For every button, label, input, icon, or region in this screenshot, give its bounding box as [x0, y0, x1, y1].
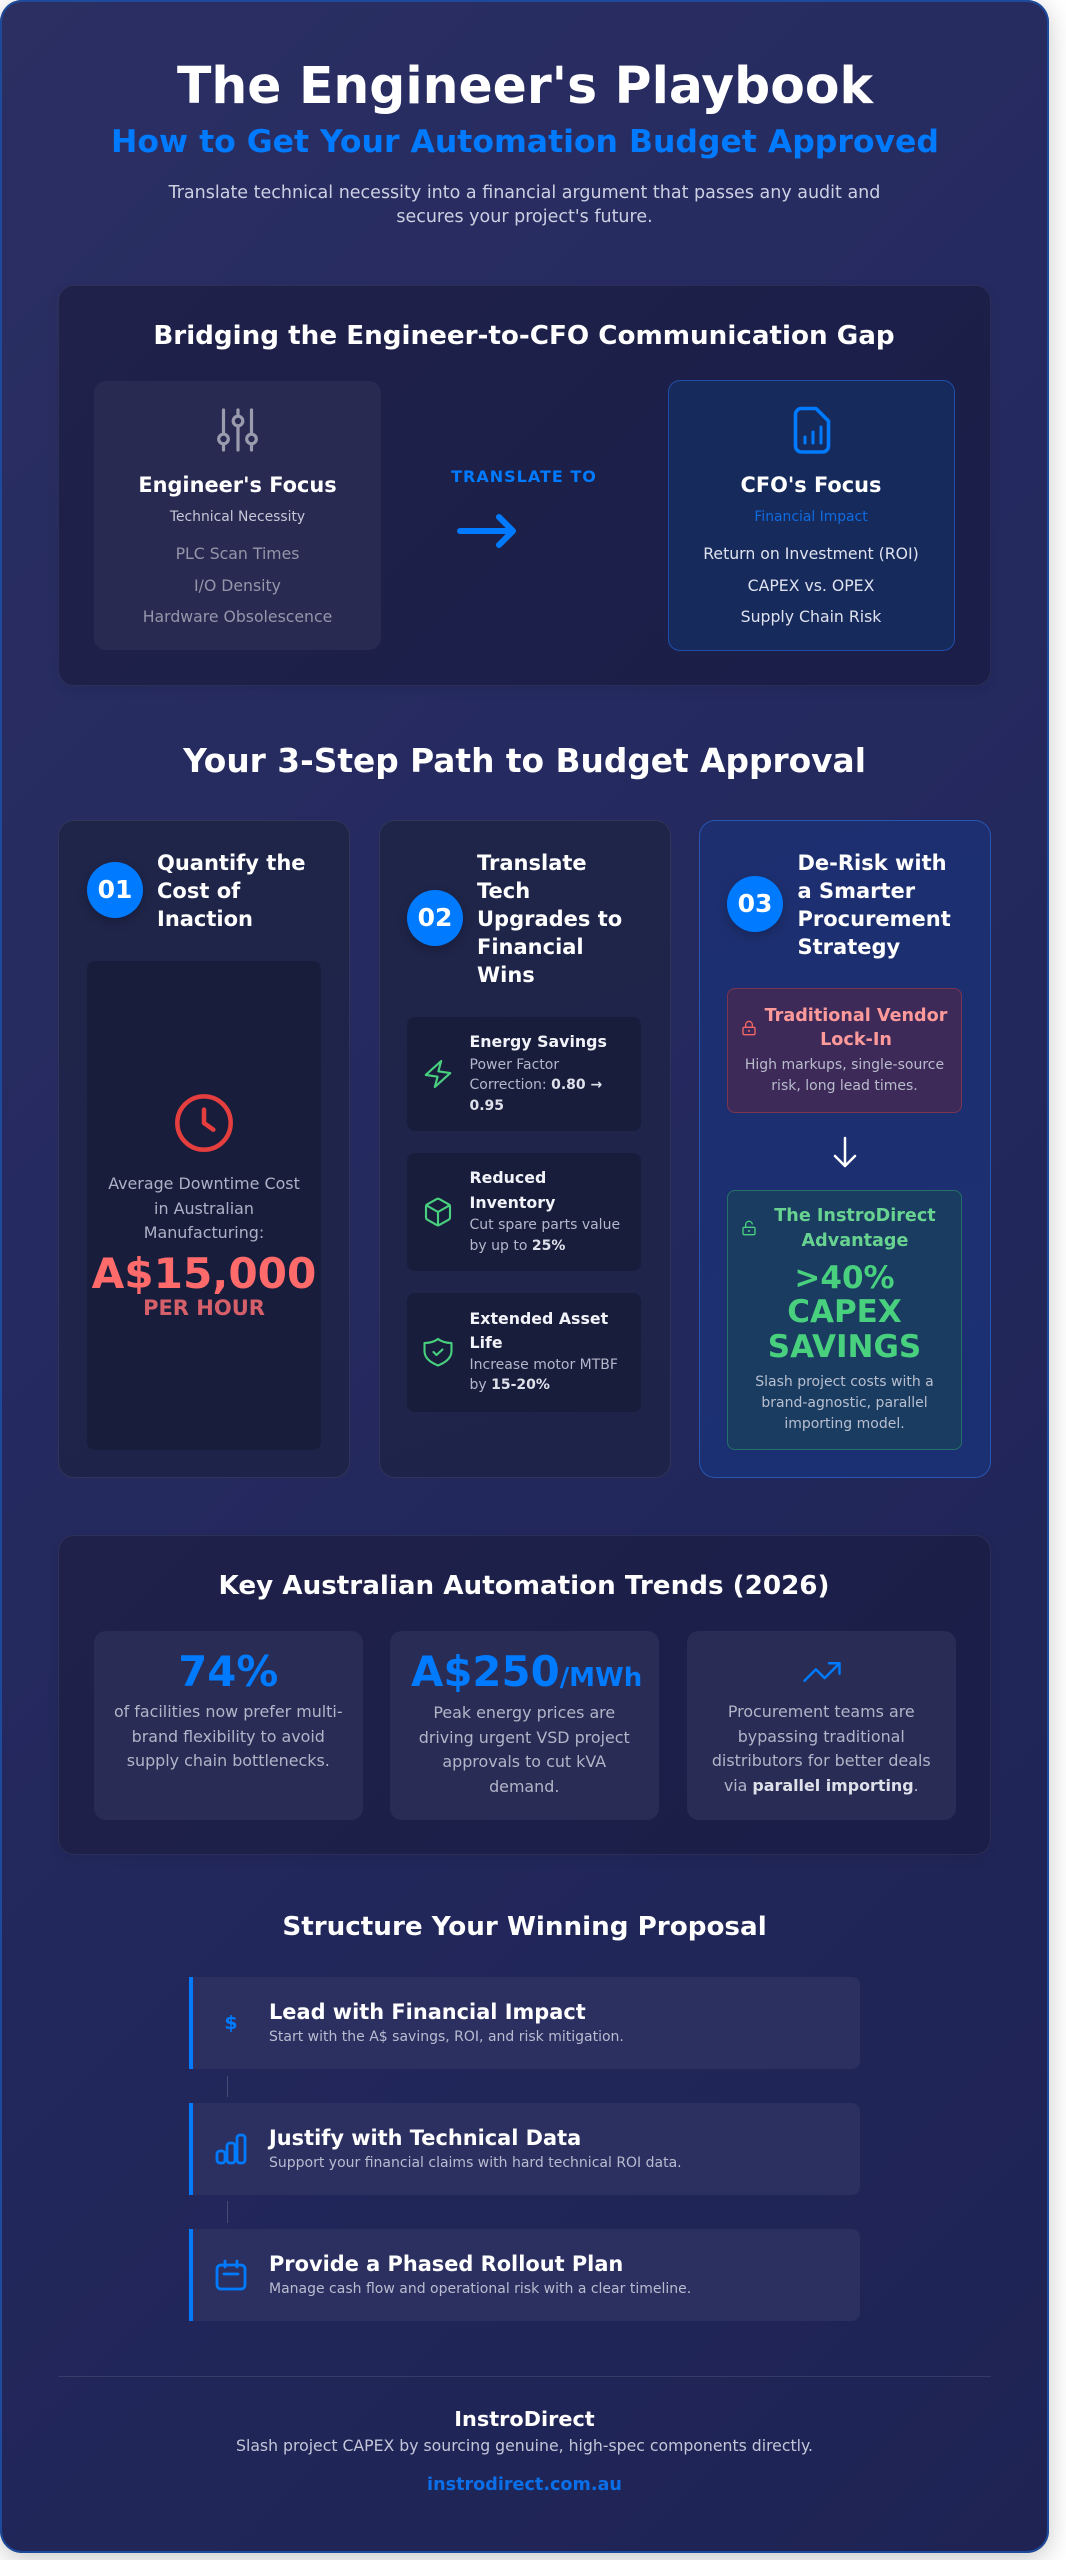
lock-in title: Lock-In: [820, 1030, 892, 1050]
energy text: Correction: 0.80 →: [470, 1077, 602, 1093]
intro text: secures your project's future.: [396, 207, 653, 227]
per hour: PER HOUR: [143, 1296, 265, 1320]
description: driving urgent VSD project: [419, 1728, 630, 1746]
lock-in text: High markups, single-source: [745, 1057, 944, 1073]
icon: lock: [742, 1020, 756, 1036]
downtime text: Average Downtime Cost: [108, 1174, 300, 1193]
asset text: by 15-20%: [470, 1377, 550, 1393]
cfo list: Supply Chain Risk: [741, 607, 881, 626]
inventory text: [470, 1217, 620, 1254]
engineer list: [143, 544, 332, 626]
icon: unlock: [742, 1220, 756, 1236]
section heading: proposal: Structure Your Winning Proposal: [282, 1912, 767, 1942]
description: [712, 1702, 931, 1794]
lock-in text: risk, long lead times.: [771, 1078, 918, 1094]
subtitle: How to Get Your Automation Budget Approved: [111, 124, 939, 160]
energy text: [470, 1057, 602, 1114]
row text: Support your financial claims with hard technical ROI data.: [269, 2155, 682, 2171]
icon: shield check: [423, 1338, 453, 1366]
icon: bolt: [424, 1060, 452, 1088]
downtime text: [108, 1174, 300, 1242]
inventory text: by up to 25%: [470, 1238, 565, 1254]
step title: [157, 851, 306, 931]
engineer list: PLC Scan Times: [176, 544, 299, 563]
engineer heading: Engineer's Focus: [138, 473, 337, 497]
icon: file chart: [794, 406, 830, 454]
step title: Strategy: [798, 935, 900, 959]
panel heading: Key Australian Automation Trends (2026): [219, 1571, 829, 1601]
engineer focus box: [94, 381, 381, 650]
step title: Inaction: [157, 907, 253, 931]
cfo list: [703, 544, 919, 626]
icon: bars: [216, 2134, 246, 2164]
panel: step 3: [698, 820, 991, 1478]
panel: automation trends: [58, 1535, 991, 1855]
inventory text: Cut spare parts value: [470, 1217, 620, 1233]
description: distributors for better deals: [712, 1751, 931, 1770]
asset text: [470, 1357, 618, 1393]
step title: Tech: [477, 879, 530, 903]
cfo sublabel: Financial Impact: [754, 509, 868, 525]
website link: instrodirect.com.au: [427, 2475, 622, 2495]
description: [114, 1702, 343, 1770]
advantage title: The InstroDirect: [774, 1206, 936, 1226]
step title: a Smarter: [798, 879, 915, 903]
panel heading: Bridging the Engineer-to-CFO Communication Gap: [153, 321, 895, 351]
value: 74%: [178, 1647, 278, 1696]
intro text: Translate technical necessity into a financial argument that passes any audit and: [169, 183, 880, 203]
inventory title: [470, 1168, 556, 1212]
step number: 03: [738, 889, 772, 918]
step number: 02: [418, 903, 452, 932]
step title: Procurement: [798, 907, 951, 931]
description: demand.: [489, 1776, 559, 1796]
proposal step: rollout plan: [189, 2229, 860, 2321]
description: via parallel importing.: [724, 1776, 919, 1794]
icon: calendar: [216, 2260, 246, 2290]
savings value: SAVINGS: [768, 1329, 921, 1365]
step number: [727, 876, 783, 932]
row text: Manage cash flow and operational risk with a clear timeline.: [269, 2281, 691, 2297]
row title: Lead with Financial Impact: [269, 2000, 586, 2024]
step number: [87, 862, 143, 918]
step title: Financial: [477, 935, 584, 959]
icon: clock: [175, 1094, 233, 1152]
savings value: CAPEX: [787, 1294, 902, 1330]
panel: step 2: [378, 820, 670, 1478]
icon: dollar: $: [224, 2012, 238, 2034]
cfo list: Return on Investment (ROI): [703, 544, 919, 563]
engineer list: I/O Density: [194, 576, 281, 594]
intro text: [168, 183, 880, 227]
asset text: Increase motor MTBF: [470, 1357, 618, 1373]
step title: Translate: [477, 851, 587, 875]
step title: Cost of: [157, 879, 240, 903]
savings text: Slash project costs with a: [755, 1374, 934, 1390]
footer text: Slash project CAPEX by sourcing genuine, high-spec components directly.: [236, 2436, 813, 2455]
title: The Engineer's Playbook: [177, 56, 873, 114]
win: extended asset life: [407, 1293, 641, 1412]
instrodirect advantage box: [727, 1190, 962, 1450]
arrow: translate: [457, 514, 516, 548]
panel: communication gap: [58, 285, 991, 686]
win: reduced inventory: [407, 1153, 641, 1271]
step title: [477, 851, 622, 987]
advantage title: Advantage: [802, 1231, 908, 1251]
step title: [798, 851, 951, 959]
step title: Wins: [477, 963, 535, 987]
asset title: [470, 1309, 608, 1352]
stat: energy price: [390, 1631, 658, 1820]
step title: De-Risk with: [798, 851, 947, 875]
arrow: down: [834, 1136, 856, 1168]
panel: step 1: [58, 820, 350, 1478]
description: brand flexibility to avoid: [132, 1726, 325, 1746]
description: of facilities now prefer multi-: [114, 1702, 343, 1721]
proposal step: financial impact: [189, 1977, 860, 2069]
energy title: Energy Savings: [470, 1032, 607, 1051]
description: Peak energy prices are: [433, 1703, 615, 1722]
step title: Quantify the: [157, 851, 306, 875]
proposal step: technical data: [189, 2103, 860, 2195]
asset title: Life: [470, 1333, 503, 1352]
cfo heading: CFO's Focus: [741, 473, 881, 497]
savings value: >40%: [794, 1260, 895, 1296]
lock-in title: [764, 1006, 948, 1050]
inventory title: Inventory: [470, 1193, 555, 1212]
engineer list: Hardware Obsolescence: [143, 607, 332, 626]
translate label: TRANSLATE TO: [451, 467, 597, 486]
downtime text: in Australian: [154, 1198, 254, 1218]
header: [111, 56, 939, 227]
savings text: importing model.: [784, 1416, 905, 1432]
engineer sublabel: Technical Necessity: [170, 509, 305, 525]
advantage title: [774, 1206, 936, 1251]
value: A$250/MWh: [411, 1647, 642, 1696]
row title: Justify with Technical Data: [269, 2126, 581, 2150]
energy text: Power Factor: [470, 1057, 559, 1073]
stat: multi-brand: [94, 1631, 362, 1820]
inventory title: Reduced: [470, 1168, 546, 1187]
savings text: [755, 1374, 934, 1432]
lock-in text: [745, 1057, 944, 1094]
icon: box: [424, 1198, 452, 1226]
section heading: 3-step path: Your 3-Step Path to Budget Approval: [183, 742, 866, 780]
savings value: [768, 1260, 921, 1365]
description: [419, 1703, 630, 1796]
description: bypassing traditional: [738, 1726, 905, 1746]
asset title: Extended Asset: [470, 1309, 608, 1328]
row text: Start with the A$ savings, ROI, and risk mitigation.: [269, 2029, 624, 2045]
footer: [236, 2407, 813, 2495]
icon: trending up: [803, 1662, 841, 1682]
win: energy savings: [407, 1017, 641, 1131]
stat: parallel importing: [687, 1631, 956, 1820]
downtime text: Manufacturing:: [144, 1223, 264, 1242]
description: Procurement teams are: [728, 1702, 915, 1721]
brand name: InstroDirect: [454, 2407, 595, 2431]
cfo list: CAPEX vs. OPEX: [748, 576, 874, 594]
cfo focus box: [668, 380, 954, 651]
downtime callout: [87, 961, 321, 1450]
step title: Upgrades to: [477, 907, 622, 931]
step number: 01: [98, 875, 132, 904]
description: supply chain bottlenecks.: [127, 1751, 330, 1770]
description: approvals to cut kVA: [442, 1752, 606, 1771]
lock-in title: Traditional Vendor: [765, 1006, 947, 1026]
energy text: 0.95: [470, 1098, 504, 1114]
row title: Provide a Phased Rollout Plan: [269, 2252, 623, 2276]
downtime value: A$15,000: [92, 1249, 316, 1298]
savings text: brand-agnostic, parallel: [761, 1394, 928, 1410]
step number: [407, 890, 463, 946]
vendor lock-in box: [727, 988, 962, 1112]
icon: sliders: [217, 408, 258, 452]
